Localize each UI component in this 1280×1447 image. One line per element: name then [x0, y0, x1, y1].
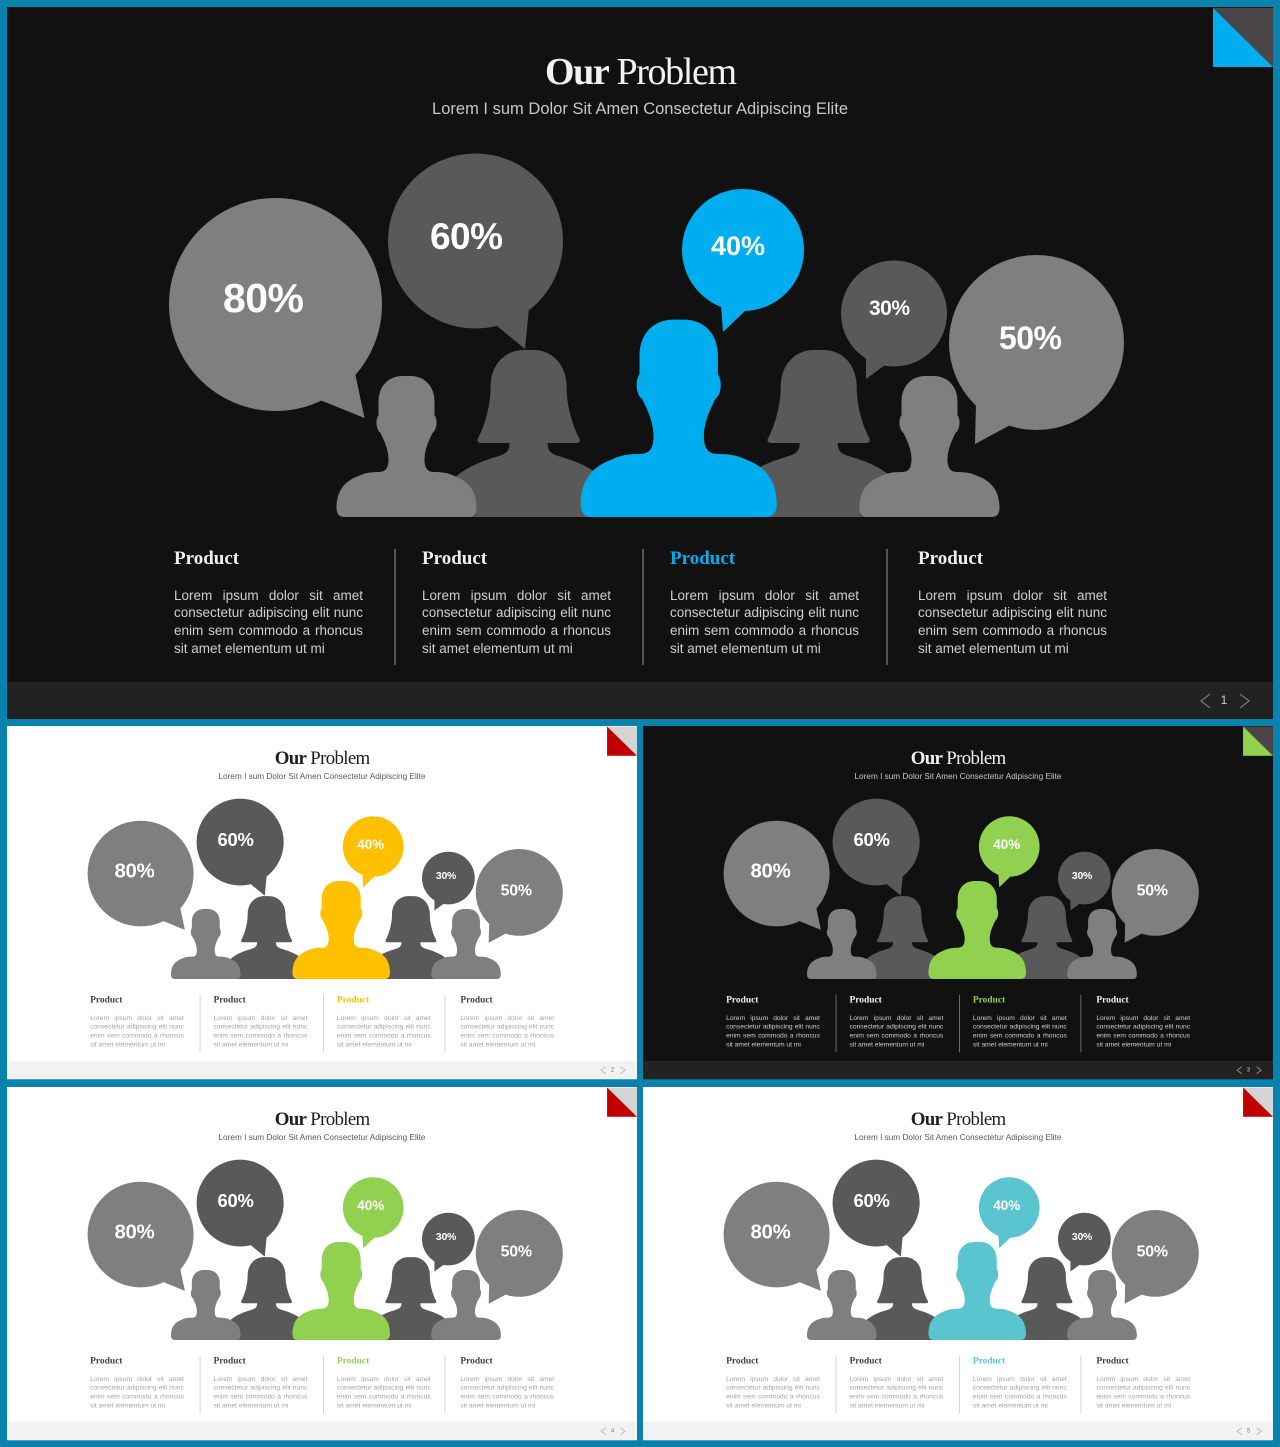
product column 1: [726, 995, 821, 1048]
subtitle: Lorem I sum Dolor Sit Amen Consectetur Adipiscing Elite: [854, 772, 1062, 781]
product column 4: consectetur adipiscing elit nunc: [1096, 1024, 1191, 1031]
title: Our Problem: [275, 748, 371, 769]
product column 1: consectetur adipiscing elit nunc: [90, 1024, 185, 1031]
corner fold: [1213, 8, 1273, 67]
product column 3: enim sem commodo a rhoncus: [670, 623, 859, 638]
speech bubble 80%: [724, 821, 830, 930]
product column 2: consectetur adipiscing elit nunc: [422, 605, 611, 620]
footer bar: [7, 1061, 637, 1079]
product column 3: sit amet elementum ut mi: [337, 1041, 412, 1048]
product column 4: Lorem ipsum dolor sit amet: [1096, 1376, 1190, 1383]
product column 3: Product: [337, 1356, 370, 1366]
subtitle: Lorem I sum Dolor Sit Amen Consectetur Adipiscing Elite: [854, 1133, 1062, 1142]
product column 4: enim sem commodo a rhoncus: [918, 623, 1107, 638]
product column 4: [1096, 1356, 1191, 1409]
product column 2: Product: [850, 995, 883, 1005]
speech bubble 40%: 40%: [711, 231, 765, 261]
slide 4: light slide with green accent: [7, 1087, 637, 1440]
product column 3: consectetur adipiscing elit nunc: [973, 1385, 1067, 1392]
product column 1: consectetur adipiscing elit nunc: [174, 605, 363, 620]
product column 2: enim sem commodo a rhoncus: [422, 623, 611, 638]
product column 2: consectetur adipiscing elit nunc: [214, 1385, 308, 1392]
pagination: [1201, 693, 1249, 708]
product column 2: Product: [422, 548, 488, 569]
speech bubble 40%: [343, 1177, 404, 1248]
speech bubble 60%: [197, 1160, 284, 1257]
speech bubble 50%: [949, 255, 1124, 444]
product column 1: [174, 548, 363, 656]
subtitle: Lorem I sum Dolor Sit Amen Consectetur Adipiscing Elite: [218, 772, 426, 781]
product column 2: consectetur adipiscing elit nunc: [850, 1024, 944, 1031]
product column 1: sit amet elementum ut mi: [90, 1402, 165, 1409]
product column 1: consectetur adipiscing elit nunc: [726, 1385, 821, 1392]
product column 1: sit amet elementum ut mi: [726, 1402, 801, 1409]
speech bubble 80%: 80%: [114, 860, 155, 882]
product column 2: Lorem ipsum dolor sit amet: [214, 1376, 307, 1383]
product column 3: sit amet elementum ut mi: [670, 641, 821, 656]
product column 3: Product: [973, 995, 1006, 1005]
product column 3: sit amet elementum ut mi: [973, 1402, 1048, 1409]
speech bubble 30%: [1058, 852, 1111, 911]
product column 4: consectetur adipiscing elit nunc: [460, 1024, 555, 1031]
product column 4: consectetur adipiscing elit nunc: [918, 605, 1107, 620]
title: Our Problem: [911, 748, 1007, 769]
pagination: [1237, 1067, 1261, 1074]
speech bubble 80%: [88, 821, 194, 930]
product column 2: Lorem ipsum dolor sit amet: [850, 1015, 943, 1022]
product column 1: sit amet elementum ut mi: [90, 1041, 165, 1048]
speech bubble 60%: [833, 799, 920, 896]
speech bubble 60%: 60%: [217, 1190, 254, 1211]
product column 2: consectetur adipiscing elit nunc: [850, 1385, 944, 1392]
product column 4: Lorem ipsum dolor sit amet: [918, 588, 1107, 603]
speech bubble 40%: 40%: [993, 1198, 1020, 1213]
product column 2: [422, 548, 611, 656]
speech bubble 40%: 40%: [993, 837, 1020, 852]
product column 1: Product: [726, 1356, 759, 1366]
product column 2: Lorem ipsum dolor sit amet: [214, 1015, 307, 1022]
people silhouettes: [171, 1242, 501, 1340]
speech bubble 40%: [343, 816, 404, 887]
product column 2: Product: [214, 1356, 247, 1366]
title: Our Problem: [545, 51, 737, 93]
speech bubble 80%: 80%: [750, 860, 791, 882]
speech bubble 50%: 50%: [999, 320, 1062, 356]
speech bubble 60%: 60%: [853, 829, 890, 850]
speech bubble 80%: 80%: [750, 1221, 791, 1243]
product column 4: [918, 548, 1107, 656]
product column 4: enim sem commodo a rhoncus: [460, 1393, 555, 1400]
product column 1: sit amet elementum ut mi: [174, 641, 325, 656]
corner fold: [607, 1087, 637, 1117]
slide 5: light slide with teal accent: [643, 1087, 1273, 1440]
product column 4: [1096, 995, 1191, 1048]
product column 4: Lorem ipsum dolor sit amet: [460, 1376, 554, 1383]
speech bubble 40%: [979, 816, 1040, 887]
pagination: 5: [1247, 1429, 1251, 1435]
people silhouettes: [171, 881, 501, 979]
product column 1: Product: [726, 995, 759, 1005]
speech bubble 50%: [1112, 1210, 1199, 1304]
product column 2: sit amet elementum ut mi: [850, 1041, 925, 1048]
product column 1: enim sem commodo a rhoncus: [90, 1393, 185, 1400]
product column 3: enim sem commodo a rhoncus: [337, 1393, 431, 1400]
product column 2: enim sem commodo a rhoncus: [214, 1393, 308, 1400]
speech bubble 60%: 60%: [217, 829, 254, 850]
speech bubble 30%: [422, 1213, 475, 1272]
product column 4: Lorem ipsum dolor sit amet: [460, 1015, 554, 1022]
product column 2: [850, 995, 944, 1048]
speech bubble 50%: 50%: [1137, 883, 1168, 900]
product column 4: sit amet elementum ut mi: [460, 1402, 536, 1409]
product column 3: enim sem commodo a rhoncus: [973, 1393, 1067, 1400]
footer bar: [7, 682, 1273, 719]
product column 4: sit amet elementum ut mi: [1096, 1402, 1172, 1409]
speech bubble 50%: 50%: [501, 1244, 532, 1261]
product column 1: Lorem ipsum dolor sit amet: [174, 588, 363, 603]
slide 1: large dark slide with blue accent: [7, 7, 1273, 719]
speech bubble 40%: 40%: [357, 837, 384, 852]
speech bubble 30%: 30%: [1072, 871, 1092, 882]
speech bubble 30%: [422, 852, 475, 911]
speech bubble 80%: [88, 1182, 194, 1291]
speech bubble 30%: 30%: [869, 297, 910, 320]
product column 1: [90, 995, 185, 1048]
product column 3: Lorem ipsum dolor sit amet: [337, 1015, 431, 1022]
speech bubble 80%: 80%: [114, 1221, 155, 1243]
product column 4: Product: [460, 1356, 494, 1366]
product column 4: Product: [460, 995, 494, 1005]
product column 3: consectetur adipiscing elit nunc: [973, 1024, 1067, 1031]
product column 3: [973, 995, 1067, 1048]
product column 1: enim sem commodo a rhoncus: [726, 1032, 821, 1039]
product column 3: Lorem ipsum dolor sit amet: [337, 1376, 431, 1383]
product column 3: [337, 995, 431, 1048]
product column 2: Product: [214, 995, 247, 1005]
product column 3: consectetur adipiscing elit nunc: [337, 1385, 431, 1392]
product column 2: enim sem commodo a rhoncus: [850, 1393, 944, 1400]
product column 3: enim sem commodo a rhoncus: [973, 1032, 1067, 1039]
product column 3: enim sem commodo a rhoncus: [337, 1032, 431, 1039]
product column 3: Product: [670, 548, 736, 569]
product column 3: [670, 548, 859, 656]
speech bubble 50%: [1112, 849, 1199, 943]
corner fold: [1243, 1087, 1273, 1117]
product column 1: enim sem commodo a rhoncus: [90, 1032, 185, 1039]
speech bubble 80%: [169, 198, 382, 418]
product column 4: Product: [918, 548, 984, 569]
pagination: [601, 1067, 625, 1074]
product column 2: sit amet elementum ut mi: [214, 1402, 289, 1409]
product column 4: enim sem commodo a rhoncus: [1096, 1032, 1191, 1039]
footer bar: [643, 1061, 1273, 1079]
speech bubble 30%: [841, 260, 947, 379]
pagination: 1: [1221, 693, 1228, 707]
product column 1: Product: [90, 1356, 123, 1366]
product column 4: enim sem commodo a rhoncus: [460, 1032, 555, 1039]
product column 1: [90, 1356, 185, 1409]
product column 4: Product: [1096, 995, 1130, 1005]
product column 1: consectetur adipiscing elit nunc: [726, 1024, 821, 1031]
speech bubble 50%: 50%: [1137, 1244, 1168, 1261]
pagination: 2: [611, 1068, 615, 1074]
speech bubble 80%: [724, 1182, 830, 1291]
product column 4: sit amet elementum ut mi: [460, 1041, 536, 1048]
footer bar: [7, 1422, 637, 1440]
product column 4: sit amet elementum ut mi: [1096, 1041, 1172, 1048]
product column 1: Product: [174, 548, 240, 569]
corner fold: [607, 726, 637, 756]
product column 4: sit amet elementum ut mi: [918, 641, 1069, 656]
speech bubble 40%: [682, 189, 804, 332]
product column 2: sit amet elementum ut mi: [422, 641, 573, 656]
product column 2: consectetur adipiscing elit nunc: [214, 1024, 308, 1031]
people silhouettes: [807, 1242, 1137, 1340]
product column 2: sit amet elementum ut mi: [850, 1402, 925, 1409]
speech bubble 60%: 60%: [853, 1190, 890, 1211]
product column 2: Product: [850, 1356, 883, 1366]
product column 4: consectetur adipiscing elit nunc: [1096, 1385, 1191, 1392]
speech bubble 30%: [1058, 1213, 1111, 1272]
speech bubble 60%: [197, 799, 284, 896]
product column 3: Product: [337, 995, 370, 1005]
product column 2: enim sem commodo a rhoncus: [850, 1032, 944, 1039]
corner fold: [1243, 726, 1273, 756]
product column 3: [973, 1356, 1067, 1409]
speech bubble 40%: [979, 1177, 1040, 1248]
product column 4: Product: [1096, 1356, 1130, 1366]
product column 2: [214, 1356, 308, 1409]
speech bubble 80%: 80%: [223, 275, 304, 321]
product column 4: enim sem commodo a rhoncus: [1096, 1393, 1191, 1400]
product column 4: consectetur adipiscing elit nunc: [460, 1385, 555, 1392]
product column 1: [726, 1356, 821, 1409]
speech bubble 50%: [476, 1210, 563, 1304]
product column 3: sit amet elementum ut mi: [973, 1041, 1048, 1048]
product column 1: enim sem commodo a rhoncus: [174, 623, 363, 638]
product column 3: sit amet elementum ut mi: [337, 1402, 412, 1409]
product column 2: Lorem ipsum dolor sit amet: [850, 1376, 943, 1383]
title: Our Problem: [911, 1109, 1007, 1130]
speech bubble 60%: [833, 1160, 920, 1257]
pagination: 3: [1247, 1068, 1251, 1074]
speech bubble 40%: 40%: [357, 1198, 384, 1213]
product column 1: Product: [90, 995, 123, 1005]
product column 3: consectetur adipiscing elit nunc: [670, 605, 859, 620]
pagination: [1237, 1428, 1261, 1435]
product column 3: consectetur adipiscing elit nunc: [337, 1024, 431, 1031]
subtitle: Lorem I sum Dolor Sit Amen Consectetur Adipiscing Elite: [218, 1133, 426, 1142]
product column 2: enim sem commodo a rhoncus: [214, 1032, 308, 1039]
speech bubble 50%: 50%: [501, 883, 532, 900]
product column 3: Lorem ipsum dolor sit amet: [973, 1015, 1067, 1022]
pagination: 4: [611, 1429, 615, 1435]
product column 1: Lorem ipsum dolor sit amet: [90, 1015, 184, 1022]
speech bubble 60%: [388, 154, 563, 349]
speech bubble 30%: 30%: [1072, 1232, 1092, 1243]
people silhouettes: [807, 881, 1137, 979]
product column 2: Lorem ipsum dolor sit amet: [422, 588, 611, 603]
product column 4: Lorem ipsum dolor sit amet: [1096, 1015, 1190, 1022]
subtitle: Lorem I sum Dolor Sit Amen Consectetur Adipiscing Elite: [432, 100, 848, 118]
speech bubble 60%: 60%: [430, 216, 503, 257]
product column 1: Lorem ipsum dolor sit amet: [726, 1376, 820, 1383]
product column 3: Product: [973, 1356, 1006, 1366]
title: Our Problem: [275, 1109, 371, 1130]
product column 2: [850, 1356, 944, 1409]
product column 1: enim sem commodo a rhoncus: [726, 1393, 821, 1400]
footer bar: [643, 1422, 1273, 1440]
speech bubble 30%: 30%: [436, 1232, 456, 1243]
product column 3: Lorem ipsum dolor sit amet: [973, 1376, 1067, 1383]
product column 2: sit amet elementum ut mi: [214, 1041, 289, 1048]
product column 4: [460, 1356, 555, 1409]
product column 1: sit amet elementum ut mi: [726, 1041, 801, 1048]
product column 1: consectetur adipiscing elit nunc: [90, 1385, 185, 1392]
pagination: [601, 1428, 625, 1435]
product column 3: Lorem ipsum dolor sit amet: [670, 588, 859, 603]
people silhouettes: [336, 320, 1000, 517]
product column 2: [214, 995, 308, 1048]
slide 3: dark slide with green accent: [643, 726, 1273, 1079]
speech bubble 50%: [476, 849, 563, 943]
product column 1: Lorem ipsum dolor sit amet: [90, 1376, 184, 1383]
product column 3: [337, 1356, 431, 1409]
product column 4: [460, 995, 555, 1048]
speech bubble 30%: 30%: [436, 871, 456, 882]
product column 1: Lorem ipsum dolor sit amet: [726, 1015, 820, 1022]
slide 2: light slide with yellow accent: [7, 726, 637, 1079]
